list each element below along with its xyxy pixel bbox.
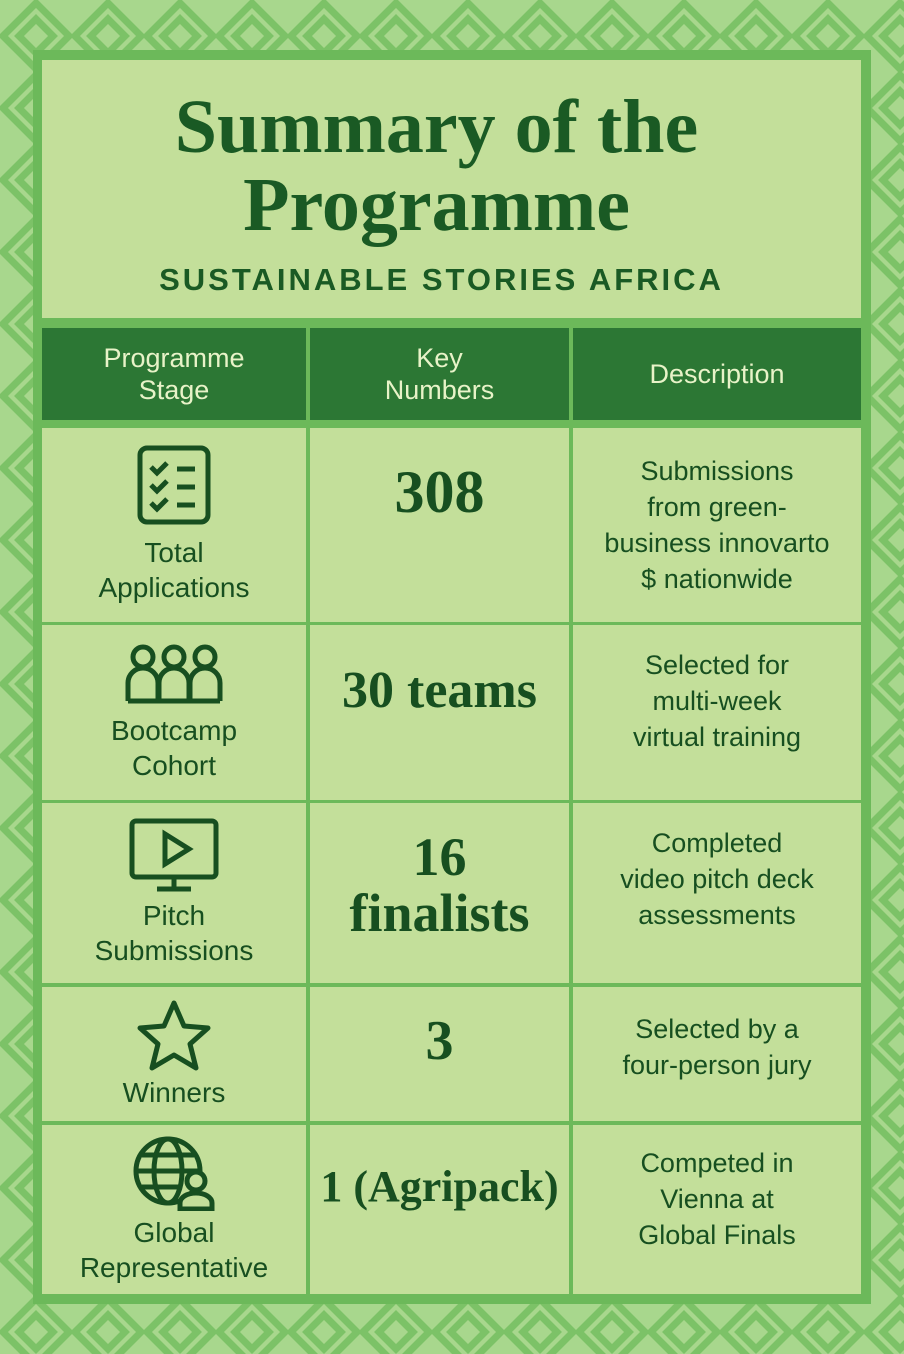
icon: monitor play [130, 818, 218, 892]
row 3 number: finalists [349, 883, 530, 943]
row 1 stage [42, 428, 306, 622]
row 4 desc [573, 987, 861, 1121]
row 2 number [310, 625, 569, 800]
row 3 desc: video pitch deck [620, 864, 814, 894]
row 3 stage: Submissions [95, 935, 253, 966]
row 1 desc: business innovarto [604, 528, 830, 558]
row 5 stage: Representative [80, 1252, 268, 1282]
icon: team [126, 644, 222, 704]
title [175, 85, 698, 247]
row 3 desc: Completed [652, 828, 782, 858]
header: description: Description [649, 359, 785, 389]
row 4 stage [42, 987, 306, 1121]
row 3 desc [573, 803, 861, 983]
row 5 desc [573, 1125, 861, 1294]
row 2 number: 30 teams [342, 662, 537, 719]
row 5 desc: Vienna at [660, 1184, 774, 1214]
row 1 desc: from green- [647, 492, 787, 522]
row 5 number [310, 1125, 569, 1294]
row 3 stage [42, 803, 306, 983]
row 1 stage: Applications [98, 572, 249, 603]
row 4 desc: four-person jury [622, 1050, 812, 1080]
row 1 number: 308 [394, 459, 484, 525]
row 3 stage: Pitch [143, 900, 205, 931]
row 2 desc: multi-week [652, 686, 782, 716]
header: numbers: Numbers [385, 375, 494, 405]
header: stage: Stage [139, 375, 209, 405]
icon: star [138, 1000, 210, 1070]
header: numbers: Key [416, 343, 463, 373]
title panel [42, 60, 861, 318]
header: numbers [310, 328, 569, 420]
row 3 number [310, 803, 569, 983]
row 1 desc [573, 428, 861, 622]
row 2 stage: Bootcamp [111, 714, 237, 746]
row 1 desc: $ nationwide [641, 564, 793, 594]
row 5 stage [42, 1125, 306, 1294]
row 5 desc: Global Finals [638, 1220, 796, 1250]
row 5 stage: Global [134, 1216, 214, 1248]
row 5 number: 1 (Agripack) [320, 1162, 559, 1211]
row 2 desc: Selected for [645, 650, 789, 680]
row 4 desc: Selected by a [635, 1014, 799, 1044]
row 1 desc: Submissions [640, 456, 794, 486]
row 1 stage: Total [144, 537, 204, 568]
subtitle: SUSTAINABLE STORIES AFRICA [159, 262, 724, 297]
row 4 number: 3 [426, 1010, 454, 1072]
row 4 stage: Winners [123, 1076, 225, 1108]
row 2 desc [573, 625, 861, 800]
title: Programme [243, 163, 630, 247]
icon: checklist [138, 446, 210, 524]
header: stage [42, 328, 306, 420]
table [42, 328, 861, 1294]
row 2 stage: Cohort [132, 750, 216, 780]
row 1 number [310, 428, 569, 622]
row 3 desc: assessments [638, 900, 796, 930]
row 3 number: 16 [412, 827, 466, 887]
header: stage: Programme [103, 343, 245, 373]
row 2 stage [42, 625, 306, 800]
header: description [573, 328, 861, 420]
row 4 number [310, 987, 569, 1121]
icon: globe person [134, 1136, 214, 1211]
row 2 desc: virtual training [633, 722, 801, 752]
row 5 desc: Competed in [640, 1148, 794, 1178]
title: Summary of the [175, 85, 698, 169]
